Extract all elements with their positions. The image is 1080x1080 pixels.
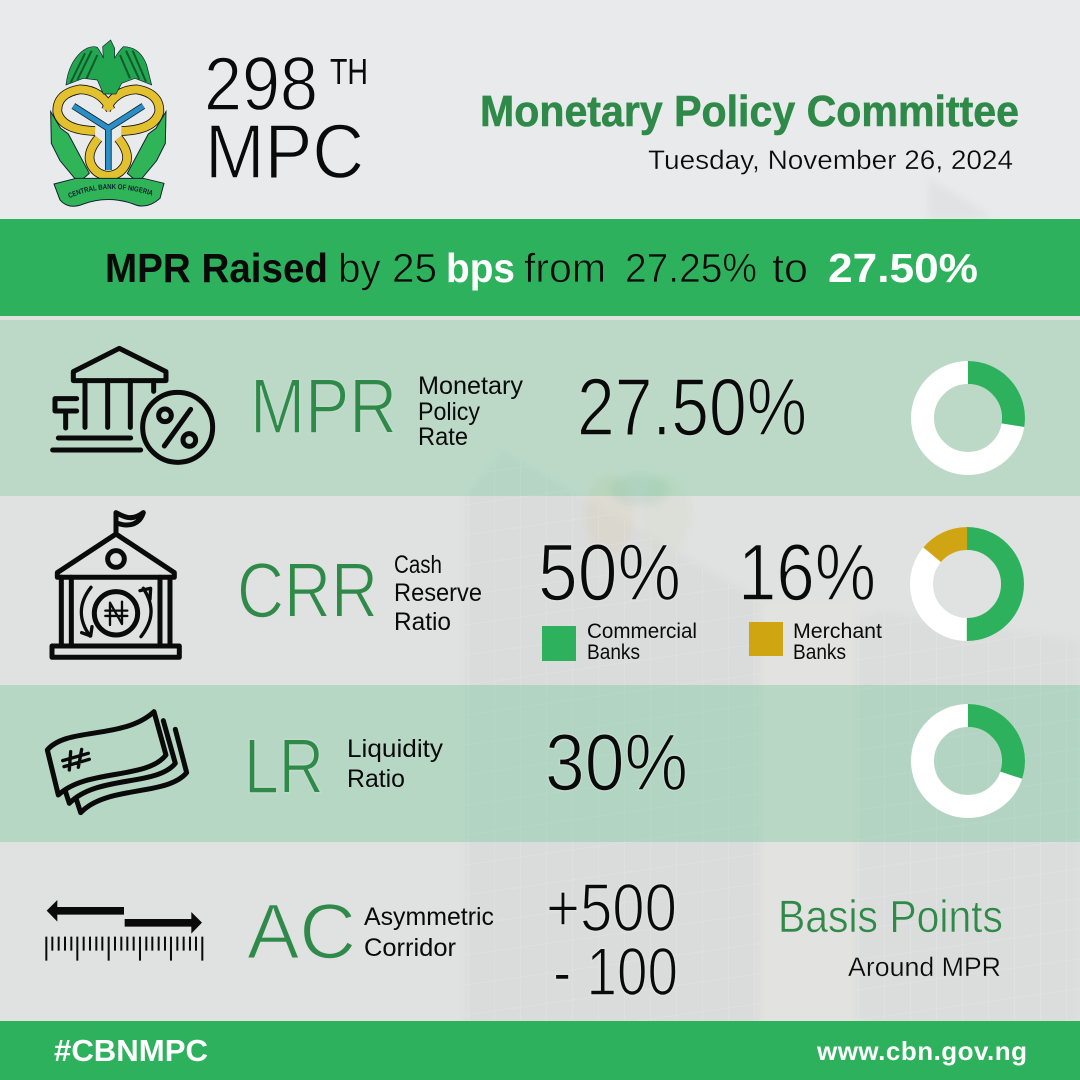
value: MPR: 27.50% bbox=[577, 362, 807, 453]
label: Asymmetric Corridor: Corridor bbox=[364, 934, 456, 962]
label: Cash Reserve Ratio: Reserve bbox=[394, 579, 482, 607]
date: Tuesday, November 26, 2024 bbox=[648, 145, 1013, 175]
donut: MPR bbox=[922, 372, 1014, 464]
label: Cash Reserve Ratio: Cash bbox=[394, 551, 442, 579]
legend: commercial banks bbox=[542, 620, 697, 664]
donut: CRR bbox=[903, 520, 1031, 648]
label: Basis Points: Basis Points bbox=[778, 891, 1003, 942]
icon: bank with naira bbox=[52, 513, 179, 657]
heading: 298th MPC: TH bbox=[330, 51, 368, 92]
label: Monetary Policy Rate: Policy bbox=[418, 398, 480, 426]
gold rings bbox=[57, 89, 159, 176]
label: Liquidity Ratio: Liquidity bbox=[347, 735, 444, 763]
value: LR: 30% bbox=[545, 718, 688, 808]
heading: 298th MPC: MPC bbox=[205, 109, 364, 195]
legend: merchant banks bbox=[749, 620, 882, 664]
label: Around MPR: Around MPR bbox=[848, 952, 1001, 982]
banner: MPR raised: to bbox=[772, 245, 808, 291]
legend: commercial banks: Commercial bbox=[587, 620, 697, 643]
eagle bbox=[66, 40, 152, 94]
label: Monetary Policy Rate bbox=[418, 372, 523, 451]
row tint: LR bbox=[0, 685, 1080, 842]
label: LR: LR bbox=[244, 722, 324, 810]
label: MPR: MPR bbox=[250, 362, 397, 450]
donut: LR bbox=[922, 716, 1014, 806]
banner: MPR raised: 27.25% bbox=[625, 245, 757, 291]
banner: MPR raised: 27.50% bbox=[828, 245, 978, 291]
label: AC: AC bbox=[247, 887, 356, 975]
legend: merchant banks: Banks bbox=[793, 641, 846, 664]
legend: commercial banks: Banks bbox=[587, 641, 640, 664]
icon: corridor arrows over ruler bbox=[46, 900, 202, 961]
value: AC: +500 bbox=[546, 870, 677, 946]
label: CRR: CRR bbox=[237, 546, 378, 634]
label: Liquidity Ratio bbox=[347, 735, 444, 793]
label: Cash Reserve Ratio: Ratio bbox=[394, 608, 451, 636]
label: Liquidity Ratio: Ratio bbox=[347, 765, 405, 793]
heading: Monetary Policy Committee: Monetary Policy Committee bbox=[480, 87, 1019, 136]
value: AC: - 100 bbox=[553, 934, 678, 1010]
banner: MPR raised bbox=[0, 219, 1080, 316]
feather lines bbox=[71, 51, 146, 83]
icon: bank with percent bbox=[53, 348, 213, 462]
value: commercial banks CRR: 50% bbox=[538, 528, 681, 618]
footer bbox=[0, 1021, 1080, 1080]
legend: merchant banks: Merchant bbox=[793, 620, 882, 643]
icon: naira notes bbox=[47, 712, 187, 813]
heading: 298th MPC bbox=[204, 42, 368, 195]
footer: #CBNMPC bbox=[54, 1033, 208, 1068]
label: Asymmetric Corridor bbox=[364, 903, 494, 962]
label: Asymmetric Corridor: Asymmetric bbox=[364, 903, 494, 931]
label: Monetary Policy Rate: Monetary bbox=[418, 372, 523, 400]
blue Y bbox=[73, 106, 143, 170]
banner: MPR raised: MPR Raised bbox=[105, 245, 328, 291]
value: AC bbox=[546, 870, 678, 1010]
ribbon text: CENTRAL BANK OF NIGERIA bbox=[68, 184, 152, 198]
row tint: MPR bbox=[0, 320, 1080, 496]
footer: www.cbn.gov.ng bbox=[816, 1036, 1027, 1066]
value: merchant banks CRR: 16% bbox=[738, 528, 876, 618]
logo: Central Bank of Nigeria crest bbox=[50, 40, 166, 207]
banner: MPR raised: by 25 bbox=[338, 245, 437, 291]
label: Monetary Policy Rate: Rate bbox=[418, 423, 468, 451]
banner: MPR raised: from bbox=[524, 245, 606, 291]
label: Cash Reserve Ratio bbox=[394, 551, 482, 636]
ribbon bbox=[54, 178, 164, 206]
hands bbox=[51, 112, 166, 183]
heading: 298th MPC: 298 bbox=[204, 42, 318, 127]
banner: MPR raised: bps bbox=[446, 245, 515, 291]
